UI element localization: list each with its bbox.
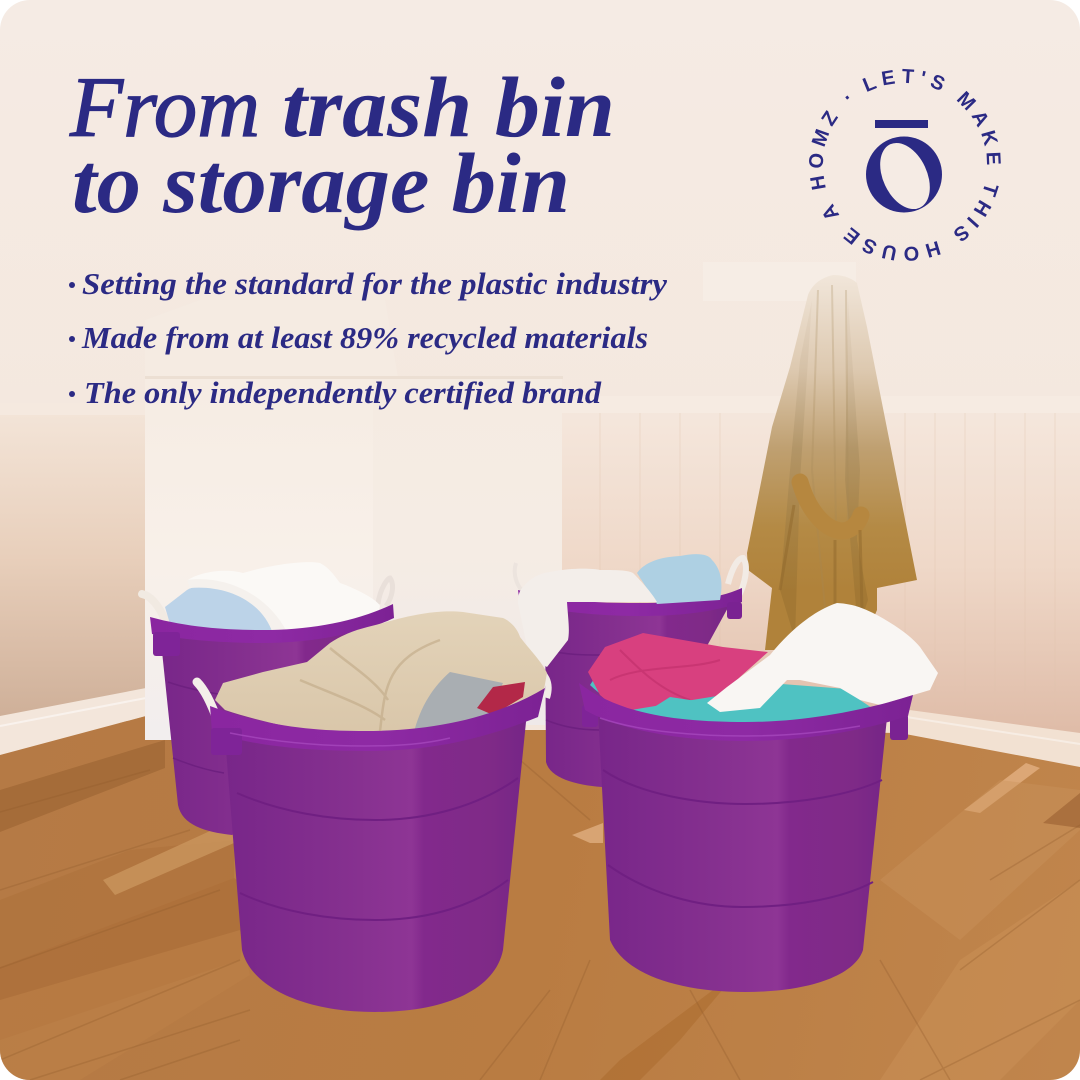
rope handles [513,562,518,578]
white towel [707,603,938,712]
grey towel [415,672,503,728]
towel backing [590,681,860,713]
wainscot panelling [0,396,1080,741]
white towel [518,569,657,667]
white towel [188,562,380,634]
robe belt [800,482,861,531]
lugs [582,705,598,727]
blue towel [637,554,721,604]
rim [210,688,545,751]
blue towel [165,588,272,630]
baseboard [0,688,1080,767]
rim [518,588,742,616]
beige towel [215,611,547,738]
body [224,712,527,1012]
light switch plate [703,262,856,301]
logo mark [866,120,942,217]
wood floor [0,716,1080,1080]
rope handle right [378,578,393,606]
bullet: plastic industry standard: Setting the standard for the plastic industry [82,266,667,301]
bands [237,778,518,920]
bands [603,770,882,907]
washing machine [145,376,563,740]
body [598,708,888,992]
rim [150,604,394,643]
rope handle right [546,673,552,699]
back left bucket [142,562,394,835]
lighter planks [103,831,234,895]
body [162,633,349,835]
rope handle left [142,594,166,622]
front left bucket [197,611,549,1012]
darker planks [0,740,165,832]
title line: to storage bin: to storage bin [72,135,570,231]
front right bucket [579,603,938,992]
teal towel [656,697,870,710]
rope handle left [197,682,218,722]
rim [579,683,913,741]
wall background [0,0,1080,780]
body [545,604,730,787]
pink towel [588,633,768,712]
red cloth [477,682,525,715]
bullet: certified brand: The only independently certified brand [84,375,602,410]
bullet list [69,266,667,410]
back right bucket [515,554,746,787]
title word: From: From [69,59,260,155]
bathrobe on hook [747,275,917,650]
logo badge [809,68,1001,261]
title [69,59,615,231]
circular slogan: LET'S MAKE THIS HOUSE A HOMZ · [809,68,1001,261]
title words: trash bin: trash bin [282,59,615,155]
bullet: recycled materials: Made from at least 89% recycled materials [81,320,648,355]
